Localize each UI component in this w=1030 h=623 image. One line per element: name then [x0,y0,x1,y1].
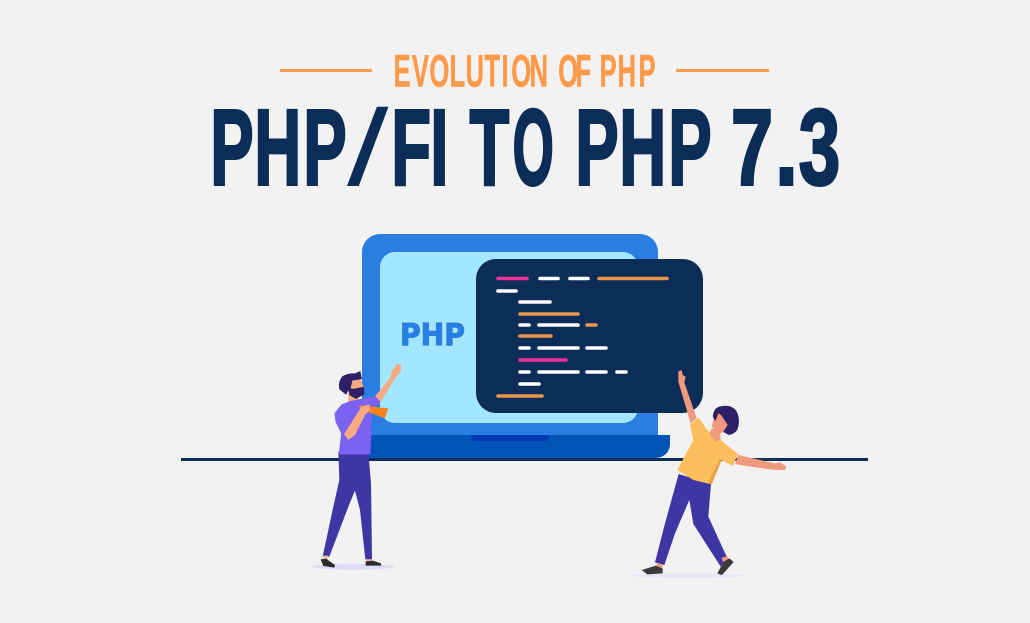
ankles [323,556,372,562]
title: dot: . [775,88,798,208]
laptop base [362,435,670,458]
legs [655,474,727,567]
outstretched arm [735,455,787,470]
neck [348,393,359,403]
main title [210,86,840,209]
ground line [181,458,868,461]
title: FI T: FI T [391,86,509,208]
title: PHP: PHP [210,86,347,208]
shirt [677,418,738,484]
shoes [642,558,734,575]
heading block [210,46,840,209]
ground shadow [312,564,395,570]
upper body [677,370,787,484]
subtitle right rule [676,69,769,72]
shirt shadow [708,459,722,484]
subtitle: Evolution of PHP: EVOLUTION OF PHP [394,46,656,96]
code panel [476,259,703,413]
torso [335,397,380,454]
holding arm [344,404,370,440]
man with megaphone [312,364,401,570]
PHP label: PHP [400,318,465,353]
laptop screen [380,252,638,423]
raised arm [373,364,401,403]
subtitle left rule [280,69,372,72]
raised arm [678,370,697,423]
title: PHP second: PHP [575,86,712,208]
code lines [498,278,667,396]
ground shadow [632,574,742,578]
hair [339,372,361,394]
title: 7: 7 [731,87,773,208]
title: slash: / [347,87,389,208]
megaphone [359,405,388,418]
title: O: O [513,88,554,209]
face [347,377,364,393]
legs [323,452,372,559]
beard [348,387,364,398]
laptop lid [362,234,658,440]
face [712,412,730,433]
panel background [476,259,703,413]
shoes [321,559,381,568]
laptop illustration [362,234,670,458]
laptop notch [471,435,549,441]
neck [709,428,721,442]
hair [713,406,738,434]
title: 3: 3 [799,87,840,208]
upper body [335,364,401,454]
person in yellow shirt [632,370,787,578]
ankles [657,556,729,569]
